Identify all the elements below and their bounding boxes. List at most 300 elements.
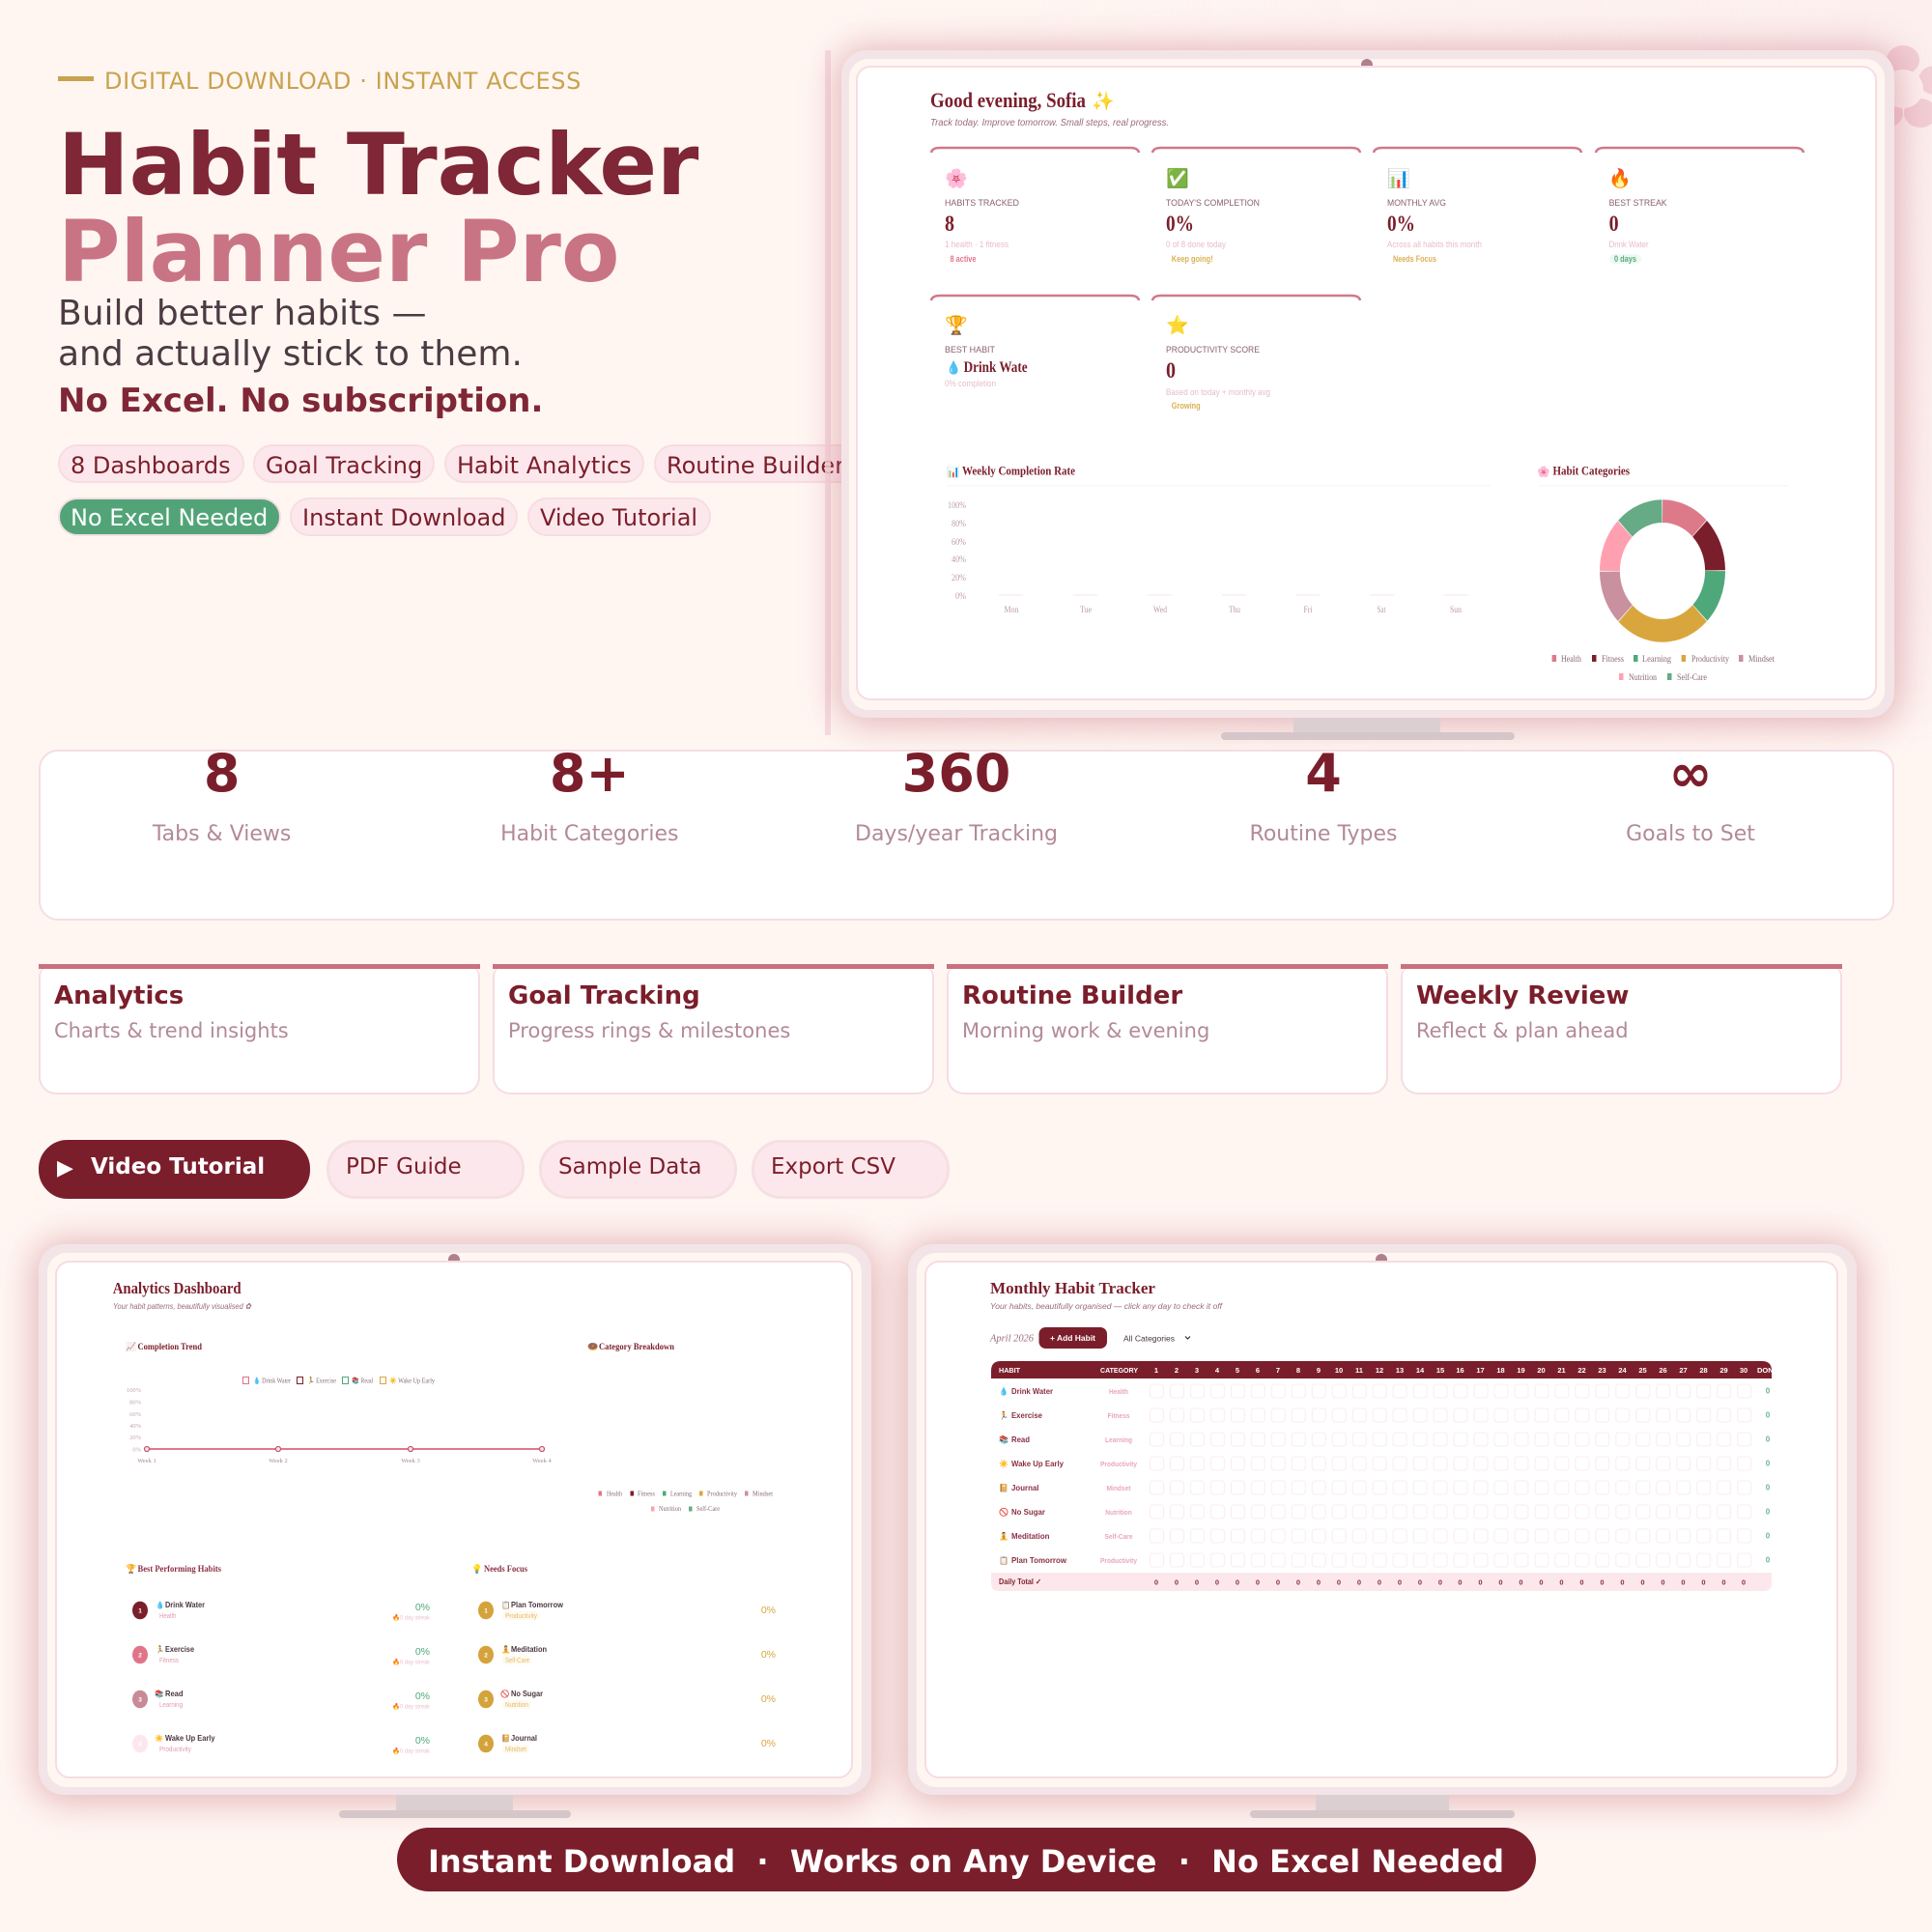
stat: routine types [1250, 743, 1397, 846]
eyebrow [58, 68, 582, 95]
habit rows: Meditation [1011, 1531, 1049, 1541]
list: needs focus: Productivity [505, 1613, 537, 1620]
month label: April 2026 [989, 1333, 1034, 1345]
list: needs focus: Journal [511, 1733, 537, 1743]
stat card: habits tracked: 8 [945, 212, 954, 236]
monitor inner bezel [917, 1253, 1847, 1787]
chart: completion trend: 📈 [126, 1341, 136, 1351]
list: needs focus: 4 [484, 1741, 488, 1748]
stat card: monthly avg: Across all habits this month [1387, 240, 1482, 250]
stat card: best habit: 💧 [946, 360, 961, 375]
daily total row: 0 [1398, 1578, 1402, 1586]
chart: habit categories donut: Fitness [1602, 654, 1624, 664]
camera dot [448, 1254, 460, 1261]
table header: 27 [1679, 1366, 1688, 1375]
pill: Video Tutorial [527, 497, 711, 536]
chart: weekly completion rate: Mon [1005, 605, 1019, 614]
chart: weekly completion rate: Fri [1304, 605, 1313, 614]
chart: completion trend: Week 4 [532, 1458, 553, 1464]
chart: completion trend: 💧 Drink Water [253, 1376, 292, 1385]
habit rows: No Sugar [1011, 1507, 1046, 1517]
pill: Instant Download [290, 497, 518, 536]
monitor screen [55, 1261, 853, 1778]
chart: weekly completion rate: Thu [1229, 605, 1240, 614]
monitor base [1250, 1810, 1515, 1818]
habit rows: Read [1011, 1435, 1030, 1444]
daily total row: 0 [1559, 1578, 1564, 1586]
daily total row: 0 [1458, 1578, 1463, 1586]
chart: weekly completion rate: 100% [948, 500, 966, 510]
feature card: analytics: Analytics [54, 981, 184, 1010]
list: best performing habits: 2 [138, 1652, 142, 1660]
table header: 29 [1719, 1366, 1728, 1375]
monitor stand [1293, 718, 1440, 732]
habit rows: Wake Up Early [1011, 1459, 1064, 1468]
decorative flower [1887, 45, 1932, 128]
monitor stand [1316, 1795, 1449, 1810]
stat card: best streak: 🔥 [1608, 167, 1632, 189]
stat card: monthly avg: MONTHLY AVG [1387, 198, 1446, 208]
daily total row: 0 [1418, 1578, 1422, 1586]
daily total row: 0 [1378, 1578, 1381, 1586]
table header: 13 [1396, 1366, 1404, 1375]
stat card: best habit [931, 296, 1139, 389]
pill: Video Tutorial: Video Tutorial [540, 504, 697, 531]
chart: habit categories donut: Self-Care [1677, 672, 1707, 682]
habit rows: 📔 [999, 1484, 1009, 1492]
table header: 2 [1175, 1366, 1179, 1375]
daily total row: 0 [1701, 1578, 1706, 1586]
list: best performing habits: Drink Water [165, 1600, 206, 1609]
hero backdrop tint [1911, 130, 1932, 628]
chart: habit categories donut: Productivity [1691, 654, 1729, 664]
table header: 5 [1236, 1366, 1239, 1375]
stat card: best streak [1596, 148, 1804, 264]
list: best performing habits [126, 1563, 431, 1754]
table header: CATEGORY [1100, 1366, 1138, 1375]
list: best performing habits: 🔥 [392, 1658, 400, 1665]
monitor bezel [908, 1244, 1857, 1795]
habit rows: Fitness [1107, 1411, 1130, 1420]
subtitle [58, 294, 523, 374]
stat card: today's completion: Keep going! [1172, 254, 1213, 264]
table header: 26 [1659, 1366, 1667, 1375]
chart: completion trend: 100% [127, 1387, 142, 1394]
pill: Routine Builder: Routine Builder [667, 452, 844, 479]
list: needs focus: 1 [484, 1607, 488, 1615]
list: best performing habits: 0% [415, 1646, 430, 1658]
stat card: today's completion: 0% [1166, 212, 1194, 236]
chart: weekly completion rate: Weekly Completion Rate [962, 464, 1075, 477]
table header: 9 [1317, 1366, 1321, 1375]
list: needs focus: 0% [761, 1649, 776, 1661]
stat card: habits tracked: 8 active [951, 254, 976, 264]
chart: completion trend [126, 1341, 553, 1464]
list: best performing habits: 0 day streak [400, 1748, 431, 1754]
stat card: best habit: Drink Wate [964, 359, 1028, 376]
stat card: productivity score [1152, 296, 1360, 411]
title: Habit Tracker [58, 115, 698, 214]
feature card: routine builder [947, 964, 1388, 1094]
daily total row: 0 [1195, 1578, 1199, 1586]
stats panel: 8+ [550, 743, 630, 804]
habit rows: 0 [1766, 1435, 1771, 1443]
chart: completion trend: Week 2 [269, 1458, 288, 1464]
list: needs focus: 2 [484, 1652, 488, 1660]
chart: weekly completion rate: Wed [1153, 605, 1167, 614]
table header: 17 [1476, 1366, 1485, 1375]
daily total row: 0 [1236, 1578, 1239, 1586]
stats panel: ∞ [1669, 743, 1712, 804]
stat card: monthly avg [1374, 148, 1581, 264]
feature card: routine builder: Routine Builder [962, 981, 1182, 1010]
chart: completion trend: ☀️ Wake Up Early [389, 1376, 435, 1385]
stat card: habits tracked: HABITS TRACKED [945, 198, 1019, 208]
stats panel: 4 [1305, 743, 1342, 804]
daily total row: 0 [1478, 1578, 1483, 1586]
list: needs focus: Self-Care [505, 1658, 529, 1664]
table header: 24 [1618, 1366, 1627, 1375]
habit rows: 0 [1766, 1507, 1771, 1517]
stat card: monthly avg: 0% [1387, 212, 1415, 236]
stat: goals to set [1626, 743, 1755, 846]
stats panel: Tabs & Views [153, 822, 291, 846]
daily total row [991, 1573, 1772, 1591]
chart: weekly completion rate: 40% [952, 554, 966, 564]
habit rows: Journal [1011, 1483, 1039, 1492]
chart: completion trend: 🏃 Exercise [307, 1376, 336, 1385]
daily total row: 0 [1721, 1578, 1726, 1586]
monitor base [1221, 732, 1515, 740]
hero panel side strip [825, 50, 831, 735]
chart: completion trend: 20% [129, 1435, 142, 1441]
button: export csv: Export CSV [771, 1154, 895, 1179]
table header: 15 [1436, 1366, 1444, 1375]
hero screen content [929, 88, 1804, 682]
habit rows: 🏃 [999, 1410, 1009, 1420]
daily total row: 0 [1256, 1578, 1260, 1586]
habit rows: 0 [1766, 1410, 1771, 1420]
table header: 21 [1557, 1366, 1566, 1375]
habit rows: Plan Tomorrow [1011, 1555, 1066, 1565]
stat card: productivity score: Based on today + monthly avg [1166, 387, 1270, 398]
stats panel: 8 [204, 743, 240, 804]
habit rows: 0 [1766, 1555, 1771, 1565]
table header: 25 [1638, 1366, 1647, 1375]
stat card: monthly avg: Needs Focus [1393, 254, 1436, 264]
list: best performing habits: Best Performing Habits [137, 1564, 221, 1574]
daily total row: 0 [1498, 1578, 1503, 1586]
stat card: productivity score: ⭐ [1166, 314, 1189, 336]
stat card: today's completion: 0 of 8 done today [1166, 240, 1226, 250]
button: video tutorial [39, 1140, 310, 1199]
stat card: today's completion: ✅ [1166, 167, 1189, 189]
table header: 6 [1256, 1366, 1260, 1375]
habit rows: ☀️ [999, 1459, 1009, 1468]
list: best performing habits: 1 [138, 1607, 142, 1615]
list: best performing habits: 0% [415, 1690, 430, 1702]
stat card: habits tracked: 🌸 [945, 167, 968, 189]
feature card: weekly review: Weekly Review [1416, 981, 1629, 1010]
daily total row: 0 [1357, 1578, 1361, 1586]
chart: category breakdown: Category Breakdown [599, 1343, 675, 1352]
table header: 18 [1496, 1366, 1505, 1375]
list: needs focus: 3 [484, 1696, 488, 1704]
chart: weekly completion rate: 📊 [947, 466, 960, 478]
daily total row: 0 [1215, 1578, 1219, 1586]
stats panel: 360 [902, 743, 1010, 804]
list: best performing habits: 4 [138, 1741, 142, 1748]
daily total row: 0 [1742, 1578, 1746, 1586]
table header: 4 [1215, 1366, 1220, 1375]
chart: completion trend: 40% [129, 1423, 142, 1430]
stat: days per year [855, 743, 1058, 846]
chart: habit categories donut [1537, 464, 1788, 682]
table header: 3 [1195, 1366, 1199, 1375]
list: best performing habits: Read [165, 1689, 184, 1698]
stat card: productivity score: PRODUCTIVITY SCORE [1166, 345, 1260, 355]
chart: category breakdown: Productivity [707, 1492, 738, 1497]
habit rows: Productivity [1100, 1556, 1138, 1565]
stat card: best habit: BEST HABIT [945, 345, 995, 355]
table header: 23 [1598, 1366, 1606, 1375]
habit rows: Self-Care [1105, 1532, 1132, 1541]
habit rows: 🚫 [999, 1507, 1009, 1517]
chart: habit categories donut: Health [1561, 654, 1581, 664]
table header: 19 [1517, 1366, 1525, 1375]
feature card: weekly review: Reflect & plan ahead [1416, 1019, 1629, 1042]
camera dot [1361, 59, 1373, 66]
list: best performing habits: 🔥 [392, 1613, 400, 1621]
add habit button: + Add Habit [1050, 1333, 1095, 1343]
table header: 1 [1154, 1366, 1158, 1375]
no excel statement: No Excel. No subscription. [58, 382, 543, 420]
camera dot [1376, 1254, 1387, 1261]
stats panel: Goals to Set [1626, 822, 1755, 846]
button: video tutorial: ▶ [57, 1156, 73, 1180]
chart: category breakdown: 🍩 [587, 1342, 598, 1351]
daily total row: Daily Total ✓ [999, 1577, 1041, 1586]
feature card: goal tracking: Goal Tracking [508, 981, 700, 1010]
chart: weekly completion rate: 0% [955, 591, 966, 601]
pill: Goal Tracking [253, 444, 435, 483]
stat card: today's completion: TODAY'S COMPLETION [1166, 198, 1260, 208]
monitor inner bezel [849, 59, 1885, 710]
list: needs focus: 📋 [501, 1601, 510, 1609]
stat card: habits tracked [931, 148, 1139, 264]
list: best performing habits: 0% [415, 1602, 430, 1613]
monitor base [339, 1810, 571, 1818]
list: best performing habits: Learning [159, 1702, 183, 1709]
habit rows: Productivity [1100, 1460, 1138, 1468]
stats panel [39, 750, 1894, 921]
list: needs focus: 🚫 [500, 1690, 509, 1698]
title [58, 115, 699, 301]
pill: Habit Analytics [444, 444, 644, 483]
list: needs focus: 🧘 [501, 1645, 510, 1654]
stat card: productivity score: 0 [1166, 358, 1176, 383]
feature card: goal tracking [493, 964, 934, 1094]
daily total row: 0 [1519, 1578, 1523, 1586]
greeting heading: ✨ [1092, 91, 1115, 112]
table header: 10 [1335, 1366, 1343, 1375]
chart: habit categories donut: 🌸 [1537, 466, 1550, 478]
daily total row: 0 [1539, 1578, 1544, 1586]
list: best performing habits: 0 day streak [400, 1660, 431, 1665]
table header: HABIT [999, 1366, 1020, 1375]
subtitle: and actually stick to them. [58, 334, 523, 374]
table header: 12 [1376, 1366, 1383, 1375]
chart: category breakdown: Mindset [753, 1492, 773, 1497]
chart: completion trend: 60% [129, 1411, 142, 1418]
feature card: analytics [39, 964, 480, 1094]
stat card: monthly avg: 📊 [1387, 167, 1410, 189]
habit rows: 0 [1766, 1532, 1771, 1540]
list: needs focus: 0% [761, 1693, 776, 1705]
habit rows: Nutrition [1105, 1508, 1132, 1517]
stat card: productivity score: Growing [1172, 401, 1201, 411]
bottom banner: Instant Download · Works on Any Device · No Excel Needed [428, 1843, 1504, 1880]
pill: No Excel Needed: No Excel Needed [71, 504, 268, 531]
pill: Routine Builder [654, 444, 862, 483]
list: best performing habits: Productivity [159, 1747, 191, 1753]
eyebrow dash [58, 76, 94, 81]
stat card: best streak: 0 days [1614, 254, 1636, 264]
list: best performing habits: 🏃 [156, 1645, 164, 1654]
habit rows: Mindset [1107, 1484, 1131, 1492]
stat card: best streak: Drink Water [1609, 240, 1649, 250]
pill: Habit Analytics: Habit Analytics [457, 452, 632, 479]
daily total row: 0 [1438, 1578, 1442, 1586]
subtitle: Build better habits — [58, 294, 426, 333]
habit rows: Exercise [1011, 1410, 1042, 1420]
habit rows: 💧 [999, 1386, 1009, 1396]
monitor bezel [39, 1244, 871, 1795]
monitor screen [924, 1261, 1838, 1778]
feature card: analytics: Charts & trend insights [54, 1019, 289, 1042]
list: best performing habits: 🏆 [126, 1563, 136, 1574]
feature card: weekly review [1401, 964, 1842, 1094]
list: best performing habits: Health [159, 1613, 177, 1620]
greeting subtitle: Track today. Improve tomorrow. Small steps, real progress. [930, 117, 1169, 128]
button: export csv [752, 1140, 950, 1199]
chart: completion trend: 0% [132, 1447, 142, 1453]
daily total row: 0 [1154, 1578, 1158, 1586]
table header: 22 [1577, 1366, 1586, 1375]
habit rows: Health [1109, 1387, 1128, 1396]
pill: No Excel Needed [58, 497, 281, 536]
monitor inner bezel [47, 1253, 862, 1787]
feature card: routine builder: Morning work & evening [962, 1019, 1209, 1042]
add habit button [1039, 1327, 1107, 1349]
daily total row: 0 [1600, 1578, 1605, 1586]
pill: Goal Tracking: Goal Tracking [266, 452, 422, 479]
chart: category breakdown: Health [607, 1492, 623, 1497]
chart: completion trend: 80% [129, 1399, 142, 1406]
daily total row: 0 [1620, 1578, 1625, 1586]
monitor bezel [841, 50, 1894, 718]
chart: category breakdown: Nutrition [659, 1506, 682, 1513]
list: needs focus: 📔 [501, 1734, 510, 1743]
pill: Instant Download: Instant Download [302, 504, 505, 531]
habit rows [999, 1379, 1771, 1573]
feature pills [58, 444, 844, 536]
monitor stand [396, 1795, 513, 1810]
table header: 20 [1537, 1366, 1546, 1375]
table header [991, 1361, 1778, 1378]
tracker heading: Monthly Habit Tracker [990, 1279, 1155, 1297]
list: best performing habits: 💧 [156, 1601, 164, 1609]
habit rows: 📋 [999, 1555, 1009, 1565]
daily total row: 0 [1661, 1578, 1665, 1586]
daily total row: 0 [1175, 1578, 1179, 1586]
pill: 8 Dashboards [58, 444, 244, 483]
chart: completion trend: Week 1 [137, 1458, 156, 1464]
list: best performing habits: 3 [138, 1696, 142, 1704]
list: needs focus: Plan Tomorrow [511, 1600, 563, 1609]
button: sample data: Sample Data [558, 1154, 701, 1179]
stats panel: Days/year Tracking [855, 822, 1058, 846]
chart: habit categories donut: Mindset [1748, 654, 1775, 664]
list: needs focus: Nutrition [505, 1702, 528, 1709]
list: needs focus: 0% [761, 1605, 776, 1616]
chart: weekly completion rate: Tue [1080, 605, 1092, 614]
list: best performing habits: 0% [415, 1735, 430, 1747]
habit rows: 0 [1766, 1484, 1771, 1492]
list: needs focus: Mindset [505, 1747, 526, 1753]
list: best performing habits: 0 day streak [400, 1615, 431, 1621]
stats panel: Habit Categories [500, 822, 678, 846]
table header: DONE [1757, 1366, 1778, 1375]
category select: All Categories [1123, 1333, 1175, 1343]
eyebrow text: DIGITAL DOWNLOAD · INSTANT ACCESS [104, 68, 582, 95]
list: needs focus: 0% [761, 1738, 776, 1749]
button: video tutorial: Video Tutorial [91, 1154, 265, 1179]
stat card: best streak: 0 [1609, 212, 1619, 236]
chart: habit categories donut: Learning [1642, 654, 1671, 664]
chart: category breakdown [587, 1342, 773, 1513]
daily total row: 0 [1296, 1578, 1300, 1586]
analytics screen content [112, 1279, 776, 1754]
habit rows: 0 [1766, 1387, 1771, 1395]
habit rows: 🧘 [999, 1531, 1009, 1541]
stat card: today's completion [1152, 148, 1360, 264]
chart: habit categories donut: Habit Categories [1553, 464, 1630, 477]
tracker subtitle: Your habits, beautifully organised — click any day to check it off [990, 1301, 1224, 1311]
list: best performing habits: ☀️ [155, 1733, 164, 1743]
button: pdf guide: PDF Guide [346, 1154, 462, 1179]
monitor: hero dashboard [817, 27, 1918, 744]
daily total row: 0 [1317, 1578, 1321, 1586]
chart: weekly completion rate: Sat [1378, 605, 1386, 614]
stat card: best habit: 0% completion [945, 379, 996, 389]
chart: completion trend: Week 3 [401, 1458, 420, 1464]
chart: weekly completion rate [947, 464, 1491, 614]
feature card: goal tracking: Progress rings & milestones [508, 1019, 790, 1042]
bottom banner [397, 1828, 1536, 1891]
list: needs focus [471, 1563, 776, 1753]
chart: completion trend: Completion Trend [137, 1343, 203, 1352]
chart: weekly completion rate: 20% [952, 573, 966, 582]
monitor screen [856, 66, 1877, 700]
stat card: best habit: 🏆 [945, 314, 968, 336]
chart: category breakdown: Fitness [638, 1492, 655, 1497]
chart: category breakdown: Learning [670, 1492, 693, 1497]
habit rows: 📚 [999, 1435, 1009, 1444]
chart: weekly completion rate: Sun [1450, 605, 1462, 614]
daily total row: 0 [1681, 1578, 1686, 1586]
daily total row: 0 [1276, 1578, 1280, 1586]
